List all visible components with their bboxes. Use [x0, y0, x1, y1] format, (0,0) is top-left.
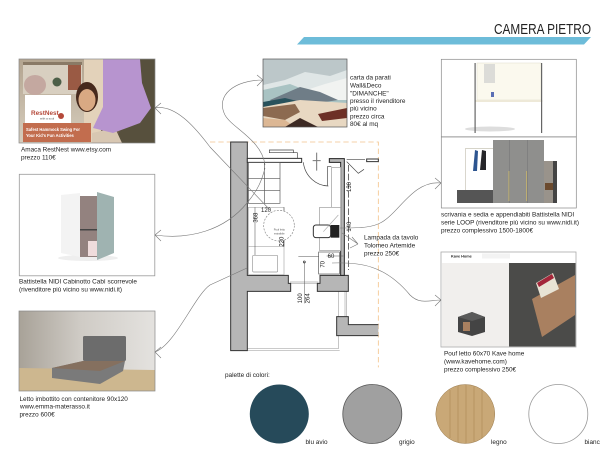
- panel: hammock: Safest Hammock Swing For: [26, 127, 80, 132]
- wallpaper caption: presso il rivenditore: [350, 98, 406, 105]
- panel: hammock: Your Kid's Fun Activities: [26, 133, 75, 138]
- floor plan: Pouf letto: [274, 228, 285, 232]
- bed caption: www.emma-materasso.it: [19, 404, 90, 410]
- lamp caption: Lampada da tavolo: [364, 234, 419, 242]
- hammock caption: Amaca RestNest www.etsy.com: [21, 146, 111, 154]
- wallpaper caption: 80€ al mq: [350, 121, 379, 128]
- swatch: grigio: [343, 384, 415, 446]
- swatch: bianco: [529, 384, 600, 446]
- panel: hammock: [19, 59, 155, 143]
- panel: wallpaper: [263, 59, 347, 127]
- desk and storage caption: serie LOOP (rivenditore più vicino su www.nidi.it): [441, 220, 579, 226]
- wardrobe caption: [19, 278, 137, 294]
- floor plan: 100: [298, 293, 304, 303]
- floor plan: [210, 142, 378, 367]
- bed caption: Letto imbottito con contenitore 90x120: [20, 396, 128, 403]
- desk and storage caption: scrivania e sedia e appendiabiti Battistella NIDI: [441, 212, 574, 218]
- floor plan: 368: [253, 212, 259, 223]
- wardrobe caption: Battistella NIDI Cabinotto Cabì scorrevole: [19, 278, 137, 286]
- pouf caption: [444, 350, 525, 374]
- swatch: blu avio: blu avio: [306, 439, 328, 446]
- panel: pouf: [441, 252, 576, 347]
- wallpaper caption: più vicino: [350, 106, 377, 112]
- swatch: legno: [436, 384, 507, 446]
- lamp caption: Tolomeo Artemide: [364, 242, 416, 250]
- floor plan: 264: [305, 293, 311, 303]
- pouf caption: (www.kavehome.com): [444, 358, 507, 366]
- wallpaper caption: [350, 74, 406, 128]
- pouf caption: Pouf letto 60x70 Kave home: [444, 350, 525, 358]
- bed caption: [19, 396, 128, 418]
- swatch: grigio: grigio: [399, 439, 415, 446]
- floor plan: 220: [280, 236, 286, 247]
- panel: loop storage: [441, 137, 576, 208]
- wardrobe caption: (rivenditore più vicino su www.nidi.it): [19, 286, 122, 294]
- wallpaper caption: prezzo circa: [350, 114, 385, 120]
- floor plan: 130: [347, 181, 353, 192]
- hammock caption: [21, 146, 111, 162]
- floor plan: 120: [261, 208, 272, 214]
- arrows: [155, 75, 441, 358]
- panel: pouf: Kave Home: [451, 254, 472, 258]
- panel: desk: [441, 59, 576, 137]
- wallpaper caption: "DIMANCHE": [350, 90, 389, 98]
- floor plan: 140: [347, 221, 353, 232]
- hammock caption: prezzo 110€: [21, 154, 56, 162]
- title accent bar: [297, 37, 591, 44]
- palette heading: palette di colori:: [225, 372, 270, 379]
- panel: wardrobe: [19, 174, 155, 276]
- panel: hammock: RestNest: [31, 110, 60, 117]
- floor plan: estraibile: [274, 232, 285, 236]
- panel: bed: [19, 311, 155, 391]
- wallpaper caption: Wall&Deco: [350, 82, 382, 90]
- desk and storage caption: prezzo complessivo 1500-1800€: [441, 228, 533, 234]
- swatch: legno: legno: [491, 439, 507, 446]
- desk and storage caption: [441, 212, 579, 234]
- floor plan: 60: [328, 254, 335, 260]
- bed caption: prezzo 600€: [20, 412, 55, 418]
- swatch: blu avio: [250, 384, 328, 446]
- panel: hammock: with a soul: [40, 116, 55, 120]
- lamp caption: prezzo 250€: [364, 250, 400, 258]
- pouf caption: prezzo complessivo 250€: [444, 366, 517, 374]
- floor plan: 70: [321, 260, 327, 268]
- lamp caption: [364, 234, 419, 258]
- wallpaper caption: carta da parati: [350, 74, 391, 82]
